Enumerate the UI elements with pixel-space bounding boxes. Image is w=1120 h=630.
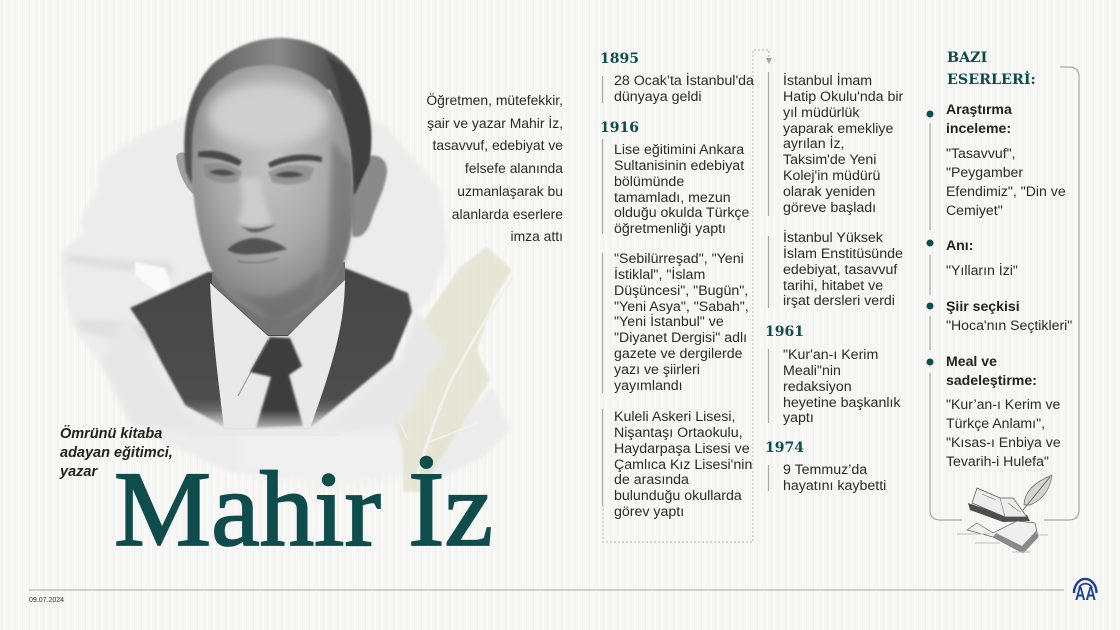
works: research titles: "Peygamber: [946, 164, 1023, 180]
event higher institute: irşat dersleri verdi: [783, 293, 895, 309]
collar edge: [238, 340, 268, 396]
works: research: Araştırma: [946, 101, 1012, 117]
works: translation titles: Türkçe Anlamı",: [946, 415, 1045, 431]
event schools: bulunduğu okullarda: [614, 488, 742, 504]
event 1895: [614, 72, 754, 105]
event 1916 education: öğretmenliği yaptı: [614, 221, 726, 237]
event schools: [614, 409, 752, 520]
lower book pages: [967, 521, 1038, 553]
event higher institute: tarihi, hitabet ve: [783, 278, 883, 294]
face shadow right: [316, 140, 352, 302]
event imam hatip: Hatip Okulu'nda bir: [783, 89, 903, 105]
event imam hatip: Kolej'in müdürü: [783, 168, 880, 184]
feather watermark: [385, 247, 513, 492]
intro text: tasavvuf, edebiyat ve: [432, 137, 563, 153]
works: translation titles: "Kısas-ı Enbiya ve: [946, 434, 1061, 450]
year 1961: 1961: [765, 324, 804, 340]
event 1895: 28 Ocak’ta İstanbul'da: [614, 73, 754, 89]
icon: AA logo: AA: [1075, 584, 1096, 604]
event publications: yazı ve şiirleri: [614, 362, 700, 378]
works: translation titles: Tevarih-i Hulefa": [946, 453, 1049, 469]
event publications: "Diyanet Dergisi" adlı: [614, 330, 747, 346]
event 1974: 9 Temmuz’da: [783, 462, 867, 478]
tie: [250, 337, 303, 428]
intro text: Öğretmen, mütefekkir,: [426, 92, 563, 108]
event imam hatip: yıl müdürlük: [783, 105, 859, 121]
watercolor backdrop: [60, 110, 510, 490]
event 1961: redaksiyon: [783, 379, 852, 395]
event 1895: dünyaya geldi: [614, 89, 702, 105]
event higher institute: [783, 230, 903, 309]
works: research titles: Cemiyet": [946, 202, 1003, 218]
forehead highlight: [208, 83, 328, 147]
tagline: adayan eğitimci,: [60, 445, 173, 461]
timeline dots: [926, 110, 934, 366]
intro text: şair ve yazar Mahir İz,: [427, 115, 563, 131]
event schools: Haydarpaşa Lisesi ve: [614, 441, 750, 457]
works panel frame: [930, 67, 1079, 520]
eyes: [209, 169, 236, 176]
icon: books and quill: [957, 475, 1052, 553]
works: research: inceleme:: [946, 120, 1011, 136]
event higher institute: edebiyat, tasavvuf: [783, 262, 897, 278]
works: poetry: "Hoca'nın Seçtikleri": [946, 317, 1072, 333]
event 1916 education: bölümünde: [614, 174, 684, 190]
event 1916 education: olduğu okulda Türkçe: [614, 205, 749, 221]
left ear: [176, 152, 195, 195]
date: 09.07.2024: [29, 597, 64, 604]
works: translation: [946, 353, 1037, 388]
portrait photo: [100, 38, 445, 436]
right ear: [350, 155, 387, 237]
works: translation titles: [946, 396, 1061, 469]
works heading: [947, 50, 1036, 88]
event imam hatip: göreve başladı: [783, 200, 876, 216]
works: research titles: "Tasavvuf",: [946, 145, 1016, 161]
event publications: [614, 251, 749, 394]
year 1974: 1974: [765, 440, 804, 456]
event 1916 education: Lise eğitimini Ankara: [614, 142, 744, 158]
jacket fade: [100, 316, 222, 436]
footer line: [29, 589, 1064, 591]
event imam hatip: Taksim'de Yeni: [783, 152, 876, 168]
event publications: "Sebilürreşad", "Yeni: [614, 251, 744, 267]
event 1961: [783, 347, 901, 426]
bottom fade: [190, 410, 340, 436]
dashed timeline frame and arrow: [603, 50, 772, 542]
eye sockets: [203, 163, 242, 183]
event 1974: [783, 462, 886, 494]
event 1916 education: Sultanisinin edebiyat: [614, 158, 744, 174]
event 1961: Meali"nin: [783, 363, 841, 379]
event higher institute: İslam Enstitüsünde: [783, 246, 903, 262]
icon: AA logo: [1074, 579, 1096, 604]
jacket: [130, 268, 412, 428]
event publications: "Yeni İstanbul" ve: [614, 314, 724, 330]
tagline: [59, 425, 173, 480]
intro text: alanlarda eserlere: [452, 206, 563, 222]
event publications: gazete ve dergilerde: [614, 346, 743, 362]
works: memoir title: "Yılların İzi": [946, 262, 1018, 278]
event imam hatip: ayrılan İz,: [783, 136, 845, 152]
timeline bars: [602, 72, 768, 505]
event imam hatip: [783, 72, 903, 216]
event 1974: hayatını kaybetti: [783, 478, 886, 494]
nose: [237, 178, 272, 227]
event publications: İstiklal", "İslam: [614, 267, 705, 283]
year 1916: 1916: [600, 120, 639, 136]
event publications: Düşüncesi", "Bugün",: [614, 283, 748, 299]
right hair strand shade: [326, 56, 370, 195]
shirt: [210, 278, 345, 428]
event schools: Nişantaşı Ortaokulu,: [614, 425, 743, 441]
mouth: [238, 258, 278, 263]
upper book dark cover: [968, 503, 1030, 522]
face: [192, 65, 353, 320]
hair: [184, 38, 371, 195]
event imam hatip: İstanbul İmam: [783, 73, 872, 89]
year 1895: 1895: [600, 51, 639, 67]
intro text: [426, 92, 563, 244]
event schools: Kuleli Askeri Lisesi,: [614, 409, 735, 425]
event schools: de arasında: [614, 472, 689, 488]
event schools: görev yaptı: [614, 504, 684, 520]
works: translation: sadeleştirme:: [946, 372, 1037, 388]
name title: Mahir İz: [114, 451, 493, 569]
event imam hatip: olarak yeniden: [783, 184, 875, 200]
works: memoir: Anı:: [946, 237, 973, 253]
works: research titles: [946, 145, 1066, 218]
chin shadow: [232, 268, 322, 322]
upper book pages: [972, 488, 1027, 517]
works: poetry: [946, 298, 1072, 333]
works: research: [946, 101, 1012, 136]
works: translation titles: "Kur’an-ı Kerim ve: [946, 396, 1060, 412]
event 1961: heyetine başkanlık: [783, 395, 901, 411]
event imam hatip: yaparak emekliye: [783, 121, 893, 137]
event higher institute: İstanbul Yüksek: [783, 230, 883, 246]
works: translation: Meal ve: [946, 353, 997, 369]
event schools: Çamlıca Kız Lisesi'nin: [614, 457, 752, 473]
tagline: yazar: [60, 464, 97, 480]
event publications: yayımlandı: [614, 378, 683, 394]
tagline: Ömrünü kitaba: [60, 426, 162, 442]
eyebrows: [198, 151, 242, 166]
table strokes: [957, 534, 1048, 552]
neck: [212, 262, 345, 335]
works heading: ESERLERİ:: [947, 72, 1036, 88]
event 1916 education: tamamladı, mezun: [614, 190, 731, 206]
event 1961: yaptı: [783, 410, 814, 426]
works: poetry: Şiir seçkisi: [946, 298, 1020, 314]
intro text: imza attı: [510, 228, 563, 244]
moustache: [227, 238, 287, 254]
quill: [1024, 475, 1052, 505]
works: research titles: Efendimiz", "Din ve: [946, 183, 1066, 199]
intro text: uzmanlaşarak bu: [457, 183, 563, 199]
event 1961: "Kur'an-ı Kerim: [783, 347, 878, 363]
intro text: felsefe alanında: [465, 160, 563, 176]
event 1916 education: [614, 142, 749, 237]
works heading: BAZI: [947, 50, 987, 66]
event publications: "Yeni Asya", "Sabah",: [614, 299, 749, 315]
